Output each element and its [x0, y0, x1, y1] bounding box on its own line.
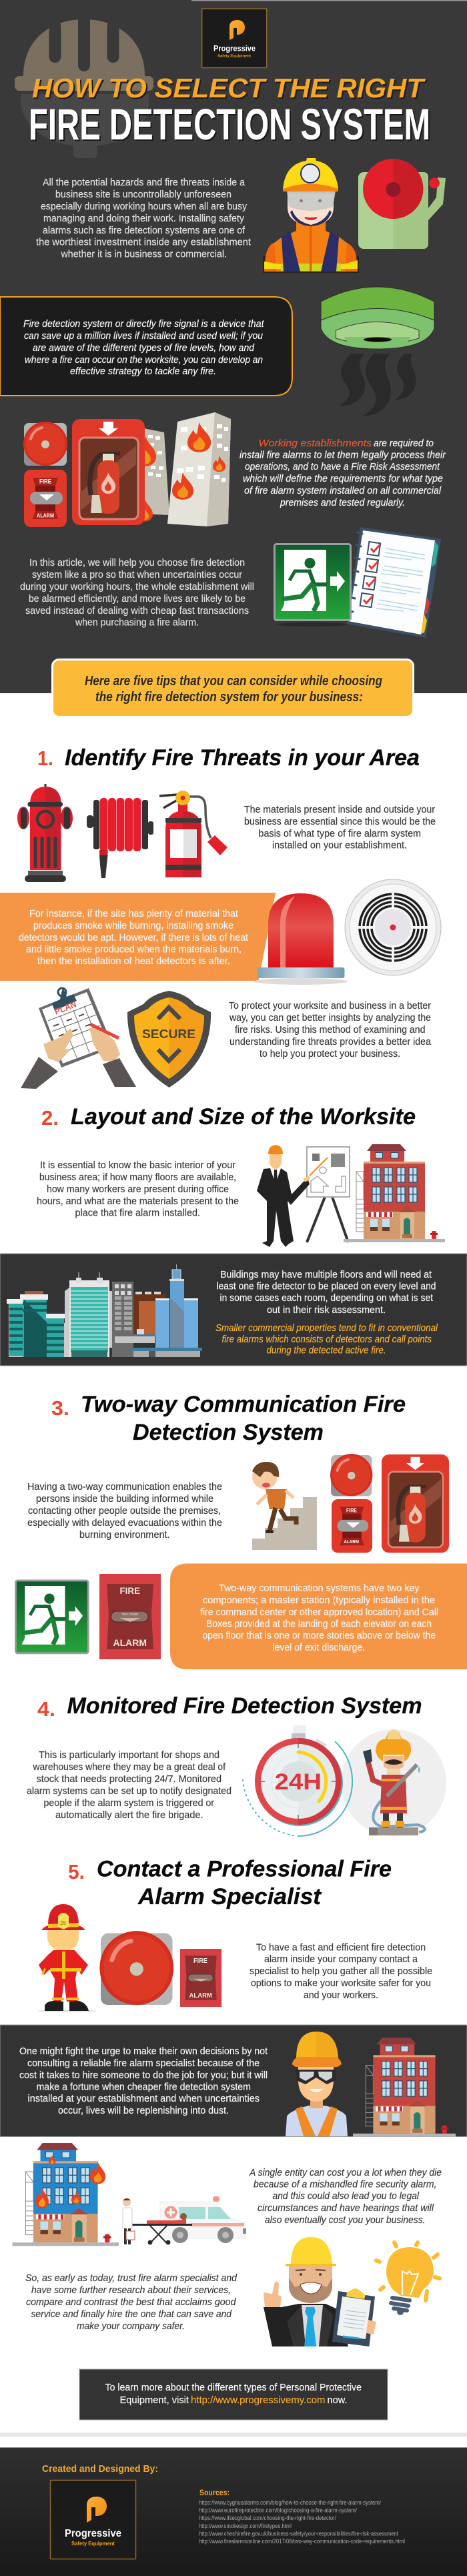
intro text: managing and doing their work. Installing safety	[43, 213, 244, 224]
text: two-way communication: Having a two-way communication enables the	[27, 1481, 222, 1492]
icon: alarm bell	[23, 422, 67, 466]
text: monitored shops: This is particularly important for shops and	[39, 1749, 219, 1761]
footer logo: Safety Equipment	[71, 2541, 115, 2547]
sources list: Sources:	[199, 2489, 229, 2497]
intro text: in this article: during your working hours, the whole establishment will	[20, 581, 254, 592]
panel: learn more call to action: To learn more about the different types of Personal Protective	[105, 2382, 362, 2393]
icon: secure shield	[127, 991, 211, 1088]
sources list	[199, 2489, 405, 2545]
heading 3: Detection System	[133, 1420, 324, 1445]
intro text: alarms such as fire detection systems are one of	[43, 225, 246, 236]
heading 4: Monitored Fire Detection System	[67, 1693, 422, 1719]
icon: fire extinguisher	[159, 791, 227, 877]
intro text	[36, 177, 252, 260]
intro text: whether it is in business or commercial.	[61, 248, 227, 260]
panel: two-way systems note: components; a master station (typically installed in the	[203, 1595, 435, 1606]
icon: 24H clock: 24H	[275, 1769, 322, 1795]
text: monitored shops: people if the alarm system is triggered or	[44, 1797, 214, 1809]
text: multiple floors: least one fire detector to be placed on every level and	[216, 1281, 436, 1292]
text: working establishments	[240, 438, 446, 508]
intro text: All the potential hazards and fire threats inside a	[43, 177, 246, 188]
text: contact a specialist	[250, 1942, 432, 2001]
footer logo: Progressive	[65, 2528, 121, 2539]
heading 5: 5.	[68, 1860, 85, 1883]
text: monitored shops: alarm systems can be set up to notify designated	[27, 1785, 231, 1797]
icon: fire alarm box: FIRE	[193, 1958, 207, 1965]
panel: learn more call to action: now.	[327, 2395, 347, 2406]
panel: orange smoke detector note: For instance, if the site has plenty of material that	[29, 908, 239, 919]
sources list: http://www.eurofireprotection.com/blog/choosing-a-fire-alarm-system/	[199, 2507, 357, 2514]
text: trust specialist: compare and contrast the best that acclaims good	[26, 2296, 236, 2308]
text: multiple floors: in some cases each room, depending on what is set	[220, 1292, 434, 1304]
icon: alarm bell	[330, 1454, 372, 1496]
text: monitored shops: stock that needs protecting 24/7. Monitored	[36, 1773, 221, 1785]
text: working establishments: which will define the requirements for what type	[243, 473, 443, 484]
panel: orange smoke detector note: detectors would be apt. However, if there is lots of heat	[19, 932, 249, 943]
text: protect worksite	[229, 1000, 432, 1059]
icon: fire hose reel	[87, 798, 153, 878]
icon: white smoke detector	[345, 879, 441, 975]
text: urge to decide	[19, 2046, 268, 2116]
text: protect worksite: understanding fire threats provides a better idea	[229, 1036, 432, 1047]
icon: light bulb	[376, 2242, 440, 2315]
divider bar	[0, 2433, 467, 2437]
watermark: hard hat	[15, 15, 153, 158]
icon: businessman with clipboard	[264, 2237, 376, 2346]
text: two-way communication: persons inside the building informed while	[36, 1493, 213, 1505]
icon: 24H clock	[243, 1725, 352, 1836]
text: urge to decide: make a fortune when cheaper fire detection system	[36, 2082, 251, 2092]
panel: two-way systems note: level of exit discharge.	[272, 1642, 365, 1653]
icon: fire alarm box: ALARM	[189, 1992, 212, 2000]
sources list: https://www.cygnusalarms.com/blog/how-to-choose-the-right-fire-alarm-system/	[199, 2499, 381, 2506]
text: two-way communication	[27, 1481, 222, 1541]
text: working establishments: of fire alarm system installed on all commercial	[244, 485, 442, 496]
intro text: in this article: In this article, we will help you choose fire detection	[29, 557, 245, 568]
text: single entity cost: and this could also lead you to legal	[272, 2190, 420, 2202]
text: working establishments: are required to	[374, 438, 434, 449]
icon: fire worker	[263, 158, 359, 273]
heading 5	[68, 1856, 392, 1909]
text: contact a specialist: alarm inside your company contact a	[264, 1954, 418, 1965]
panel: fire detection callout: Fire detection system or directly fire signal is a device that	[23, 318, 264, 330]
panel: fire detection callout: effective strategy to tackle any fire.	[70, 366, 216, 377]
text: interior of business: It is essential to know the basic interior of your	[40, 1160, 236, 1171]
text: materials: installed on your establishment.	[272, 839, 407, 851]
text: smaller commercial properties: fire alarms which consists of detectors and call points	[221, 1334, 432, 1345]
text: interior of business: how many workers are present during office	[47, 1184, 229, 1195]
text: working establishments: premises and tested regularly.	[280, 497, 405, 508]
panel: orange smoke detector note: then the installation of heat detectors is after.	[37, 955, 230, 967]
icon: plan clipboard with hands	[21, 987, 136, 1089]
text: contact a specialist: and your workers.	[304, 1990, 378, 2001]
text: protect worksite: way, you can get better insights by analyzing the	[229, 1012, 431, 1023]
panel: orange smoke detector note: produces smoke while burning, installing smoke	[33, 920, 234, 931]
icon: fire alarm box: PULL DOWN	[122, 1613, 138, 1616]
text: trust specialist: make your company safer.	[77, 2320, 185, 2332]
text: two-way communication: especially with delayed evacuations within the	[27, 1517, 222, 1529]
intro text: in this article	[20, 557, 254, 628]
text: single entity cost	[249, 2167, 442, 2226]
icon: smoke detector with smoke	[321, 287, 434, 416]
text: interior of business: place that fire alarm installed.	[75, 1208, 200, 1218]
panel: two-way systems note: fire command center or other approved location) and Call	[200, 1607, 438, 1618]
text: contact a specialist: To have a fast and efficient fire detection	[256, 1942, 426, 1954]
icon: pull station	[24, 470, 67, 527]
icon: brick building	[344, 1144, 445, 1242]
icon: man running down stairs	[252, 1462, 317, 1550]
text: materials: basis of what type of fire alarm system	[259, 828, 421, 839]
icon: fire extinguisher cabinet	[382, 1454, 449, 1553]
icon: pull station	[332, 1499, 372, 1553]
heading 1: Identify Fire Threats in your Area	[65, 745, 420, 771]
panel: two-way systems note: Two-way communication systems have two key	[219, 1583, 420, 1594]
footer panel	[0, 2447, 467, 2576]
heading 5: Alarm Specialist	[137, 1884, 322, 1909]
heading 2: Layout and Size of the Worksite	[71, 1104, 416, 1130]
text: contact a specialist: options to make your worksite safer for you	[251, 1978, 431, 1989]
icon: pull station: FIRE	[39, 478, 51, 484]
icon: pull station: ALARM	[37, 512, 54, 519]
text: two-way communication: contacting other people outside the premises,	[28, 1505, 221, 1517]
panel: fire detection callout	[0, 297, 292, 396]
text: multiple floors: Buildings may have multiple floors and will need at	[220, 1269, 432, 1280]
panel: fire detection callout: where a fire can occur on the worksite, you can develop an	[25, 354, 263, 366]
text: single entity cost: because of a mishandled fire security alarm,	[254, 2179, 436, 2190]
text: trust specialist: service and finally hire the one that can save and	[31, 2308, 232, 2320]
top edge strip	[191, 0, 467, 1]
icon: fire hydrant	[17, 784, 73, 882]
icon: secure shield: SECURE	[142, 1027, 195, 1041]
intro text: especially during working hours when all are busy	[41, 201, 247, 212]
panel: orange smoke detector note	[0, 893, 276, 981]
icon: checklist	[347, 527, 441, 638]
text: two-way communication: burning environment.	[79, 1529, 169, 1541]
panel: learn more call to action: Equipment, visit	[120, 2395, 189, 2406]
text: monitored shops: warehouses where they may be a great deal of	[33, 1761, 226, 1773]
icon: firefighter with hose	[341, 1729, 446, 1836]
text: trust specialist: have some further research about their services,	[31, 2284, 231, 2296]
text: working establishments: install fire alarms to let them legally process their	[240, 450, 446, 460]
icon: fire alarm box	[99, 1574, 161, 1659]
icon: fire alarm box: FIRE	[120, 1585, 140, 1596]
heading 4: 4.	[37, 1697, 55, 1721]
icon: burning blue building	[12, 2143, 119, 2246]
text: smaller commercial properties: during the detected active fire.	[267, 1345, 386, 1356]
text: trust specialist	[25, 2272, 238, 2332]
text: urge to decide: cost it takes to hire someone to do the job for you; but it will	[19, 2070, 268, 2081]
icon: brick building	[353, 2038, 456, 2137]
title: HOW TO SELECT THE RIGHT	[32, 73, 426, 103]
icon: city skyline	[7, 1264, 202, 1357]
text: materials: business are essential since this would be the	[244, 816, 436, 827]
panel: two-way systems note: open floor that is one or more stories above or below the	[203, 1630, 436, 1641]
text: smaller commercial properties: Smaller commercial properties tend to fit in conventional	[215, 1322, 438, 1334]
text: materials	[244, 804, 436, 851]
icon: red siren	[254, 893, 348, 985]
intro text: business site is uncontrollably unforeseen	[55, 189, 231, 200]
text: urge to decide: installed at your establishment and when uncertainties	[28, 2093, 260, 2104]
text: monitored shops: automatically alert the fire brigade.	[55, 1809, 203, 1821]
panel: two-way systems note: Boxes provided at the landing of each elevator on each	[206, 1619, 432, 1629]
title	[29, 73, 430, 149]
heading 3	[51, 1392, 406, 1445]
text: contact a specialist: specialist to help you gather all the possible	[250, 1966, 432, 1977]
icon: exit sign	[275, 544, 351, 620]
panel: specialist cost band	[0, 2025, 467, 2136]
sources list: http://www.smokesign.com/firetypes.html	[199, 2523, 292, 2529]
text: interior of business: hours, and what are the materials present to the	[37, 1196, 239, 1207]
intro text: in this article: be alarmed efficiently, and more lives are likely to be	[29, 593, 246, 604]
icon: fire alarm bell with lever	[358, 159, 446, 249]
panel: buildings band	[0, 1254, 467, 1366]
text: single entity cost: circumstances and have hearings that will	[258, 2202, 434, 2214]
exit sign shadow	[278, 622, 347, 626]
panel: learn more call to action	[79, 2369, 388, 2420]
icon: fire extinguisher cabinet	[72, 419, 145, 525]
text: urge to decide: One might fight the urge to make their own decisions by not	[19, 2046, 268, 2057]
text: protect worksite: to help you protect your business.	[260, 1048, 400, 1059]
intro text: in this article: saved instead of dealing with cheap fast transactions	[25, 605, 249, 616]
text: multiple floors	[216, 1269, 436, 1316]
text: single entity cost: also eventually cost you your business.	[265, 2214, 426, 2226]
icon: firefighter in red: 25	[60, 1920, 66, 1926]
text: protect worksite: fire risks. Using this method of examining and	[235, 1024, 426, 1035]
panel: learn more call to action: http://www.progressivemy.com	[191, 2395, 326, 2406]
intro text: in this article: when purchasing a fire alarm.	[75, 616, 199, 628]
text: single entity cost: A single entity can cost you a lot when they die	[249, 2167, 442, 2178]
footer logo	[51, 2481, 136, 2559]
icon: fire alarm box: ALARM	[113, 1637, 147, 1648]
panel: five tips banner: the right fire detection system for your business:	[95, 690, 363, 705]
intro text: the worthiest investment inside any establishment	[36, 236, 252, 248]
panel: five tips banner	[52, 659, 414, 717]
icon: pull station: FIRE	[346, 1508, 358, 1513]
panel: orange smoke detector note: and little smoke produced when the materials burn,	[26, 943, 242, 955]
panel: two-way systems note	[170, 1564, 467, 1669]
icon: firefighter in red	[37, 1904, 97, 2012]
panel: fire detection callout: can save up a million lives if installed and used well; if you	[24, 330, 264, 342]
heading 2: 2.	[41, 1106, 59, 1130]
top dark background panel	[0, 0, 467, 693]
icon: burning buildings	[135, 412, 231, 526]
panel: five tips banner: Here are five tips that you can consider while choosing	[85, 674, 382, 689]
heading 5: Contact a Professional Fire	[97, 1856, 392, 1881]
sources list: http://www.cheshirefire.gov.uk/business-safety/your-responsibilities/fire-risk-assessment	[199, 2530, 398, 2537]
logo: Progressive Safety Equipment	[202, 9, 267, 68]
text: smaller commercial properties	[215, 1322, 438, 1356]
icon: exit sign	[15, 1581, 88, 1653]
footer credit heading: Created and Designed By:	[42, 2463, 158, 2475]
panel: fire detection callout: are aware of the different types of fire levels, how and	[33, 342, 255, 354]
icon: plan clipboard with hands: PLAN	[53, 999, 78, 1017]
icon: engineer with goggles	[286, 2032, 348, 2136]
text: working establishments: Working establishments	[259, 438, 372, 449]
icon: fire alarm box	[180, 1949, 221, 2007]
icon: large alarm bell	[99, 1931, 173, 2005]
sources list: http://www.firealarmsonline.com/2017/08/two-way-communication-code-requirements.html	[199, 2538, 405, 2545]
text: interior of business: business area; if how many floors are available,	[39, 1172, 236, 1183]
text: protect worksite: To protect your worksite and business in a better	[229, 1000, 431, 1011]
icon: presenter with floor plan	[257, 1145, 350, 1247]
text: monitored shops	[27, 1749, 231, 1821]
heading 3: 3.	[51, 1396, 69, 1420]
text: urge to decide: occur, lives will be replenishing into dust.	[58, 2105, 229, 2116]
logo: Progressive Safety Equipment: Safety Equipment	[217, 55, 251, 59]
text: materials: The materials present inside and outside your	[244, 804, 435, 815]
heading 3: Two-way Communication Fire	[81, 1392, 406, 1417]
logo: Progressive Safety Equipment: Progressive	[213, 44, 256, 53]
icon: pull station: ALARM	[344, 1539, 359, 1545]
text: interior of business	[37, 1160, 239, 1218]
sources list: https://www.ifsecglobal.com/choosing-the-right-fire-detector/	[199, 2515, 336, 2521]
icon: paramedic, stretcher and ambulance	[123, 2196, 246, 2244]
intro text: in this article: system like a pro so that when uncertainties occur	[32, 569, 242, 580]
text: trust specialist: So, as early as today, trust fire alarm specialist and	[25, 2272, 238, 2284]
text: working establishments: operations, and to have a Fire Risk Assessment	[245, 461, 440, 472]
text: urge to decide: consulting a reliable fire alarm specialist because of the	[27, 2058, 260, 2069]
heading 1: 1.	[37, 747, 53, 770]
text: multiple floors: out in their risk assessment.	[267, 1304, 386, 1316]
